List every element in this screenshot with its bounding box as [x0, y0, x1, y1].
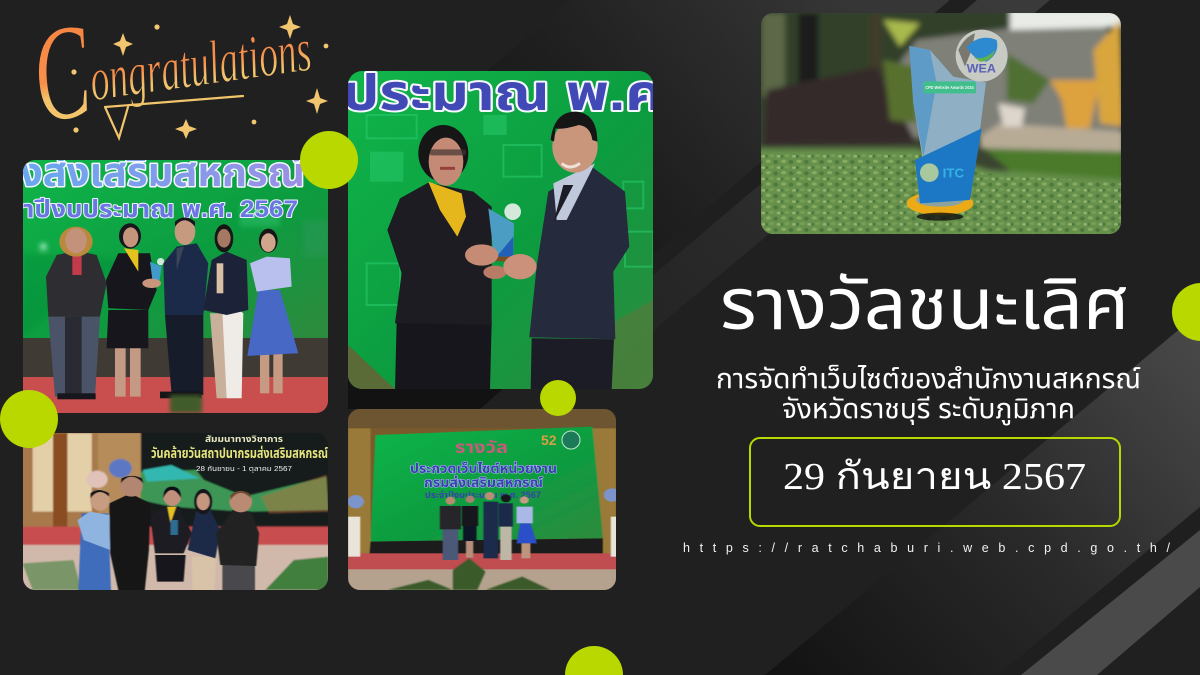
date box	[750, 438, 1120, 526]
photo banner text: ประมาณ พ.ศ	[342, 65, 664, 121]
website url: https://ratchaburi.web.cpd.go.th/	[683, 541, 1171, 555]
photo backdrop title: วันคล้ายวันสถาปนากรมส่งเสริมสหกรณ์	[151, 445, 328, 461]
photo backdrop award text: รางวัล	[455, 438, 508, 457]
woman with yellow shirt	[387, 125, 492, 390]
photo backdrop heading: สัมมนาทางวิชาการ	[205, 434, 283, 444]
photo: wide shot of stage	[348, 408, 620, 591]
people in photo 4	[348, 488, 620, 560]
people in photo 3	[78, 475, 259, 590]
logo: 52 years: 52	[541, 432, 557, 448]
icon: underline flourish	[105, 96, 243, 138]
photo: glass trophy in garden	[757, 8, 1127, 240]
photo: group of five on green stage	[14, 150, 328, 413]
man in navy suit	[529, 112, 629, 390]
photo: glass trophy in garden: WEA	[967, 62, 996, 76]
date box: 29 กันยายน 2567	[783, 456, 1086, 498]
person 1	[46, 227, 107, 399]
people in photo 1	[46, 217, 298, 399]
trophy with hands	[465, 203, 537, 279]
congratulations heading	[23, 0, 328, 152]
photo: handing over the trophy	[342, 65, 664, 390]
person 2	[106, 223, 157, 397]
photo backdrop year text: ประจำปีงบประมาณ พ.ศ. 2567	[425, 490, 541, 500]
trophy base	[907, 191, 973, 215]
subtitle: การจัดทำเว็บไซต์ของสำนักงานสหกรณ์	[716, 363, 1141, 394]
logo: 52 years	[541, 431, 580, 449]
photo backdrop dates: 28 กันยายน - 1 ตุลาคม 2567	[196, 465, 292, 474]
photo banner date text: ำปีงบประมาณ พ.ศ. 2567	[14, 196, 298, 223]
photo banner text: งส่งเสริมสหกรณ์	[20, 150, 305, 195]
title: รางวัลชนะเลิศ	[720, 265, 1130, 345]
glass body	[909, 46, 986, 157]
person 3	[142, 217, 208, 398]
icon: sparkles	[71, 15, 328, 139]
photo: group with exhibition backdrop	[20, 430, 330, 597]
photo: glass trophy in garden: CPD Website Awards 2024	[925, 85, 974, 91]
photo backdrop department text: กรมส่งเสริมสหกรณ์	[424, 475, 543, 490]
photo: glass trophy in garden: ITC	[943, 165, 964, 180]
subtitle: จังหวัดราชบุรี ระดับภูมิภาค	[782, 393, 1075, 426]
subtitle	[716, 363, 1141, 426]
foliage texture	[760, 153, 1123, 237]
stage plants	[388, 558, 551, 590]
trophy small	[150, 258, 164, 282]
person 4	[203, 224, 248, 398]
photo backdrop contest text: ประกวดเว็บไซต์หน่วยงาน	[410, 461, 557, 476]
globe emblem	[956, 30, 1008, 82]
person 5	[247, 229, 298, 393]
